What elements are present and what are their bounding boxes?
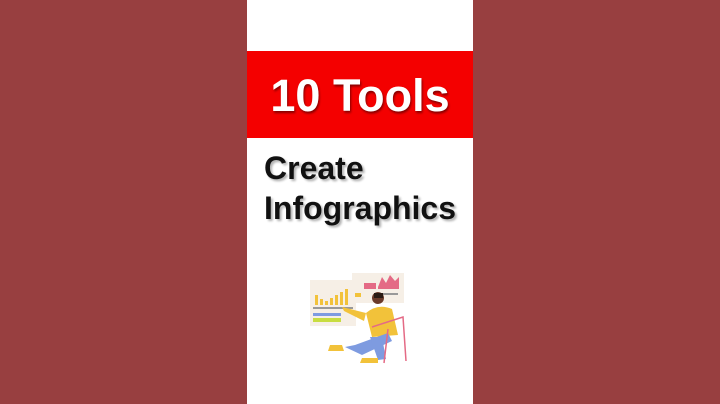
title: 10 Tools (270, 70, 450, 121)
subtitle: Infographics (264, 190, 456, 226)
chart board right (352, 273, 404, 303)
subtitle: Create (264, 150, 364, 186)
red title band (247, 51, 473, 138)
person (328, 292, 406, 363)
white center panel (247, 0, 473, 404)
subtitle (264, 150, 458, 229)
chart board left (310, 280, 356, 326)
illustration: person presenting charts (310, 273, 407, 364)
